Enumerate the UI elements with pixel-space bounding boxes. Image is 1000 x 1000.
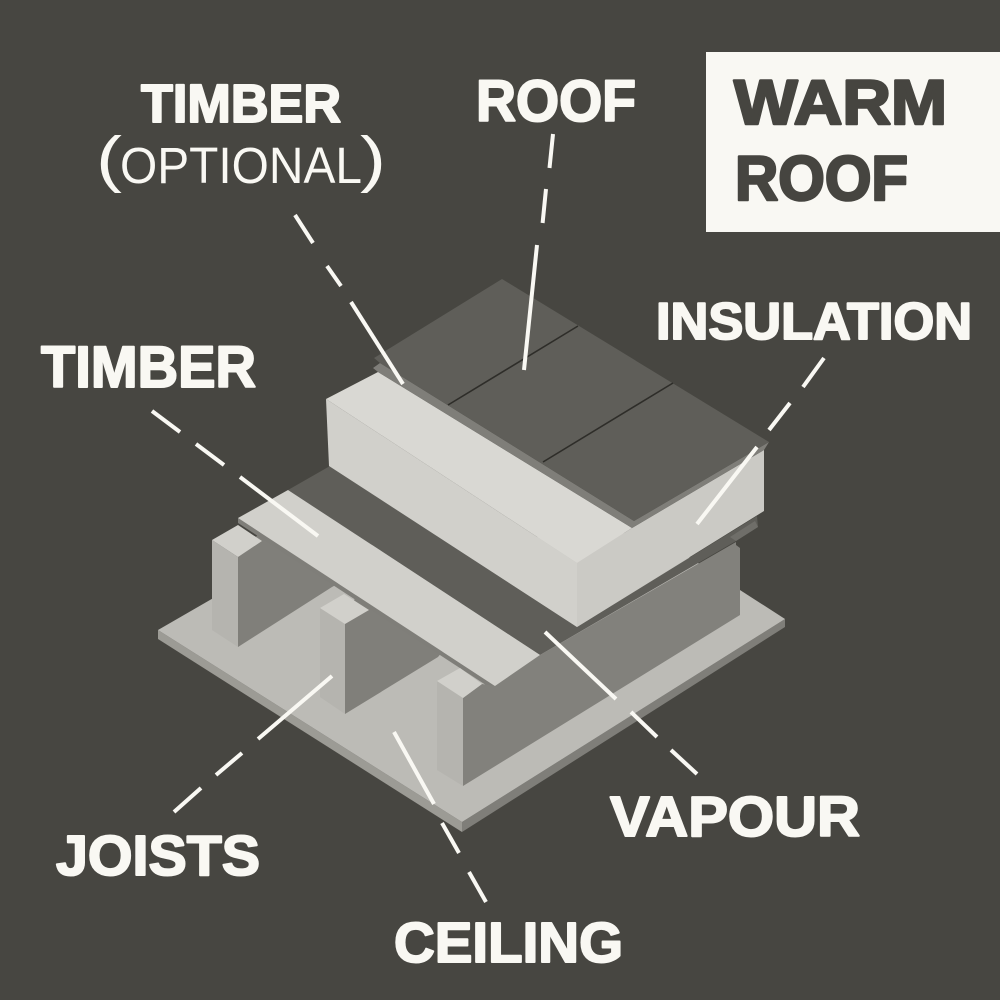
label: timber optional: TIMBER xyxy=(141,74,341,134)
leader: roof xyxy=(524,134,553,370)
joist 2 xyxy=(320,585,452,714)
label: ceiling: CEILING xyxy=(394,911,623,975)
leader: timber optional xyxy=(295,215,403,384)
label: joists: JOISTS xyxy=(56,824,260,888)
label: timber optional: ( xyxy=(96,125,122,194)
leader: vapour xyxy=(545,632,697,774)
vapour layer xyxy=(288,466,758,655)
label: timber: TIMBER xyxy=(41,335,256,400)
title panel xyxy=(706,52,1000,232)
illustration: warm roof build-up xyxy=(158,279,785,832)
roof covering xyxy=(374,279,769,521)
label: vapour: VAPOUR xyxy=(610,785,860,849)
title text xyxy=(734,68,947,214)
leader: joists xyxy=(174,676,332,812)
title text: WARM xyxy=(734,68,947,138)
joist 3 and rim joist xyxy=(437,542,740,786)
optional timber layer xyxy=(373,363,769,528)
label: insulation: INSULATION xyxy=(656,293,972,351)
label: timber optional: OPTIONAL xyxy=(120,137,362,194)
leader: ceiling xyxy=(394,732,486,902)
label: roof: ROOF xyxy=(476,69,636,134)
label: timber optional xyxy=(96,74,386,194)
title text: ROOF xyxy=(735,144,908,214)
timber plank xyxy=(238,490,540,691)
leader: insulation xyxy=(697,358,824,524)
label: timber optional: ) xyxy=(360,125,386,194)
ceiling board xyxy=(158,532,785,832)
joist 1 xyxy=(212,525,345,647)
vapour layer edge xyxy=(730,521,758,541)
insulation xyxy=(326,372,764,627)
leader: timber xyxy=(152,411,318,536)
